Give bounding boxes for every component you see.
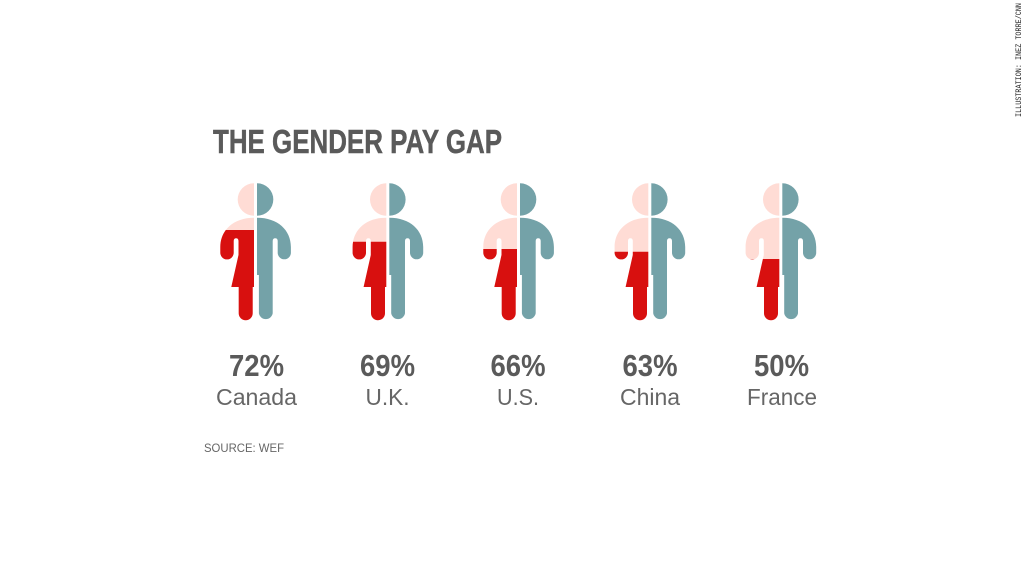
- label: Canada: Canada: [216, 384, 298, 410]
- label: France: [747, 348, 817, 410]
- source note: SOURCE: WEF: [204, 441, 284, 455]
- figure: U.S. 66%: [483, 183, 554, 320]
- title: THE GENDER PAY GAP: [213, 123, 502, 160]
- label: Canada: [216, 348, 298, 410]
- figure: Canada 72%: [220, 183, 291, 320]
- label: France: France: [747, 384, 817, 410]
- label: U.S.: [490, 348, 546, 410]
- label: U.S.: 66%: [490, 348, 546, 383]
- label: China: 63%: [622, 348, 678, 383]
- figure: China 63%: [615, 183, 685, 320]
- figure: U.K. 69%: [353, 183, 423, 320]
- figure: France 50%: [746, 183, 816, 320]
- label: U.K.: 69%: [360, 348, 415, 383]
- label: U.K.: U.K.: [366, 384, 410, 410]
- label: U.K.: [360, 348, 415, 410]
- label: France: 50%: [754, 348, 809, 383]
- label: Canada: 72%: [229, 348, 284, 383]
- label: China: China: [620, 384, 681, 410]
- label: China: [620, 348, 681, 410]
- label: U.S.: U.S.: [497, 384, 539, 410]
